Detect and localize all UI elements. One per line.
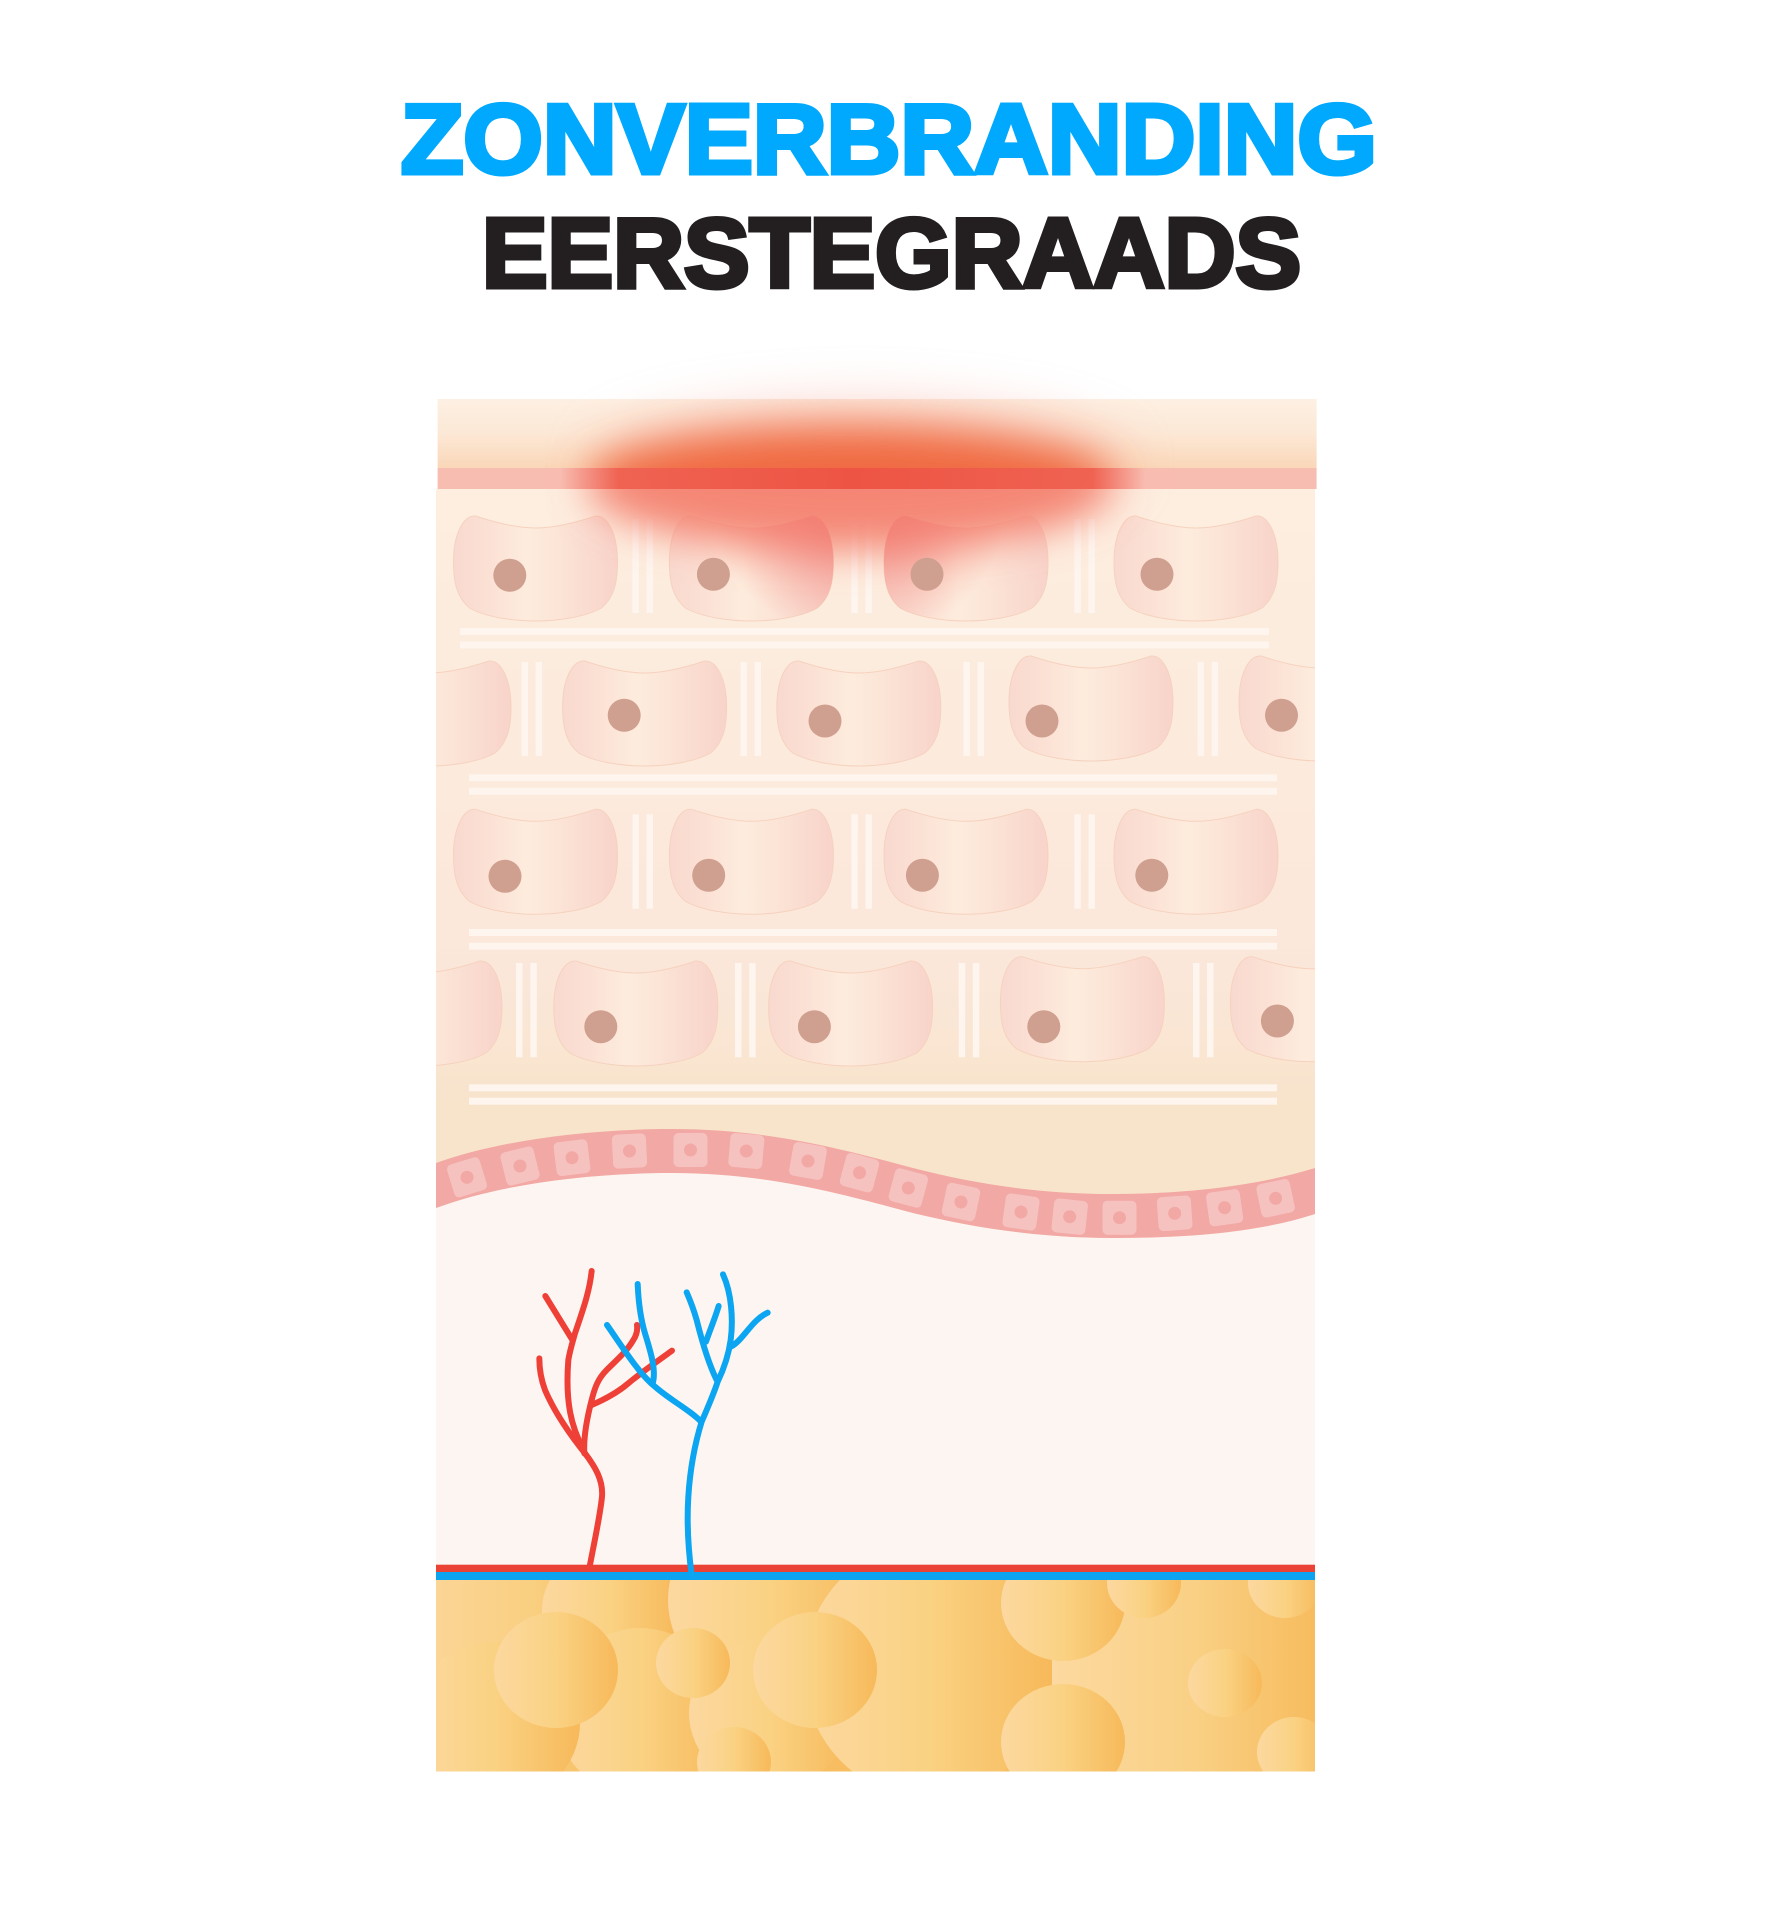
- title: EERSTEGRAADS: EERSTEGRAADS: [482, 198, 1301, 308]
- icon: blue venous capillary tree: [607, 1274, 768, 1575]
- cell row 2: [436, 656, 1315, 766]
- sunburn glow: [560, 403, 1145, 622]
- glow: upper layer: [570, 399, 1130, 468]
- glow: tint in second cell: [740, 517, 834, 614]
- fat cells, back row: [504, 1580, 1009, 1772]
- intercellular bars: [460, 519, 1277, 1105]
- fat layer: [436, 1580, 1315, 1772]
- glow: surface band: [560, 468, 1145, 489]
- basal cells: [446, 1133, 1296, 1235]
- layer: dermis fill under the wave: [436, 1173, 1315, 1300]
- icon: red arterial capillary tree: [539, 1271, 672, 1568]
- layer: pink surface band: [438, 468, 1317, 489]
- glow: faint halo above the skin: [595, 403, 1125, 527]
- artery line: [436, 1565, 1315, 1572]
- cell nuclei: [488, 558, 1298, 1043]
- fat background right: [1052, 1580, 1315, 1772]
- infographic canvas: [401, 102, 1374, 1772]
- panel: skin cross-section: [436, 378, 1317, 1772]
- cell rows: [338, 516, 1403, 1066]
- cell row 3: [454, 809, 1278, 914]
- layer: dermis: [436, 1245, 1315, 1566]
- title: ZONVERBRANDING: ZONVERBRANDING: [401, 84, 1377, 194]
- cell row 1: [454, 516, 1278, 621]
- layer: epidermis background: [436, 489, 1315, 1249]
- fat cells, front row: [494, 1580, 1315, 1772]
- glow: tint in third cell: [884, 516, 980, 615]
- cell row 4: [436, 956, 1315, 1066]
- vein line: [436, 1572, 1315, 1580]
- glow: below the band: [568, 489, 1132, 578]
- layer: pink band: [436, 1129, 1315, 1238]
- fat background left: [436, 1580, 1052, 1772]
- layer: epidermis surface strip: [438, 399, 1317, 468]
- wavy basal layer: [436, 1129, 1315, 1300]
